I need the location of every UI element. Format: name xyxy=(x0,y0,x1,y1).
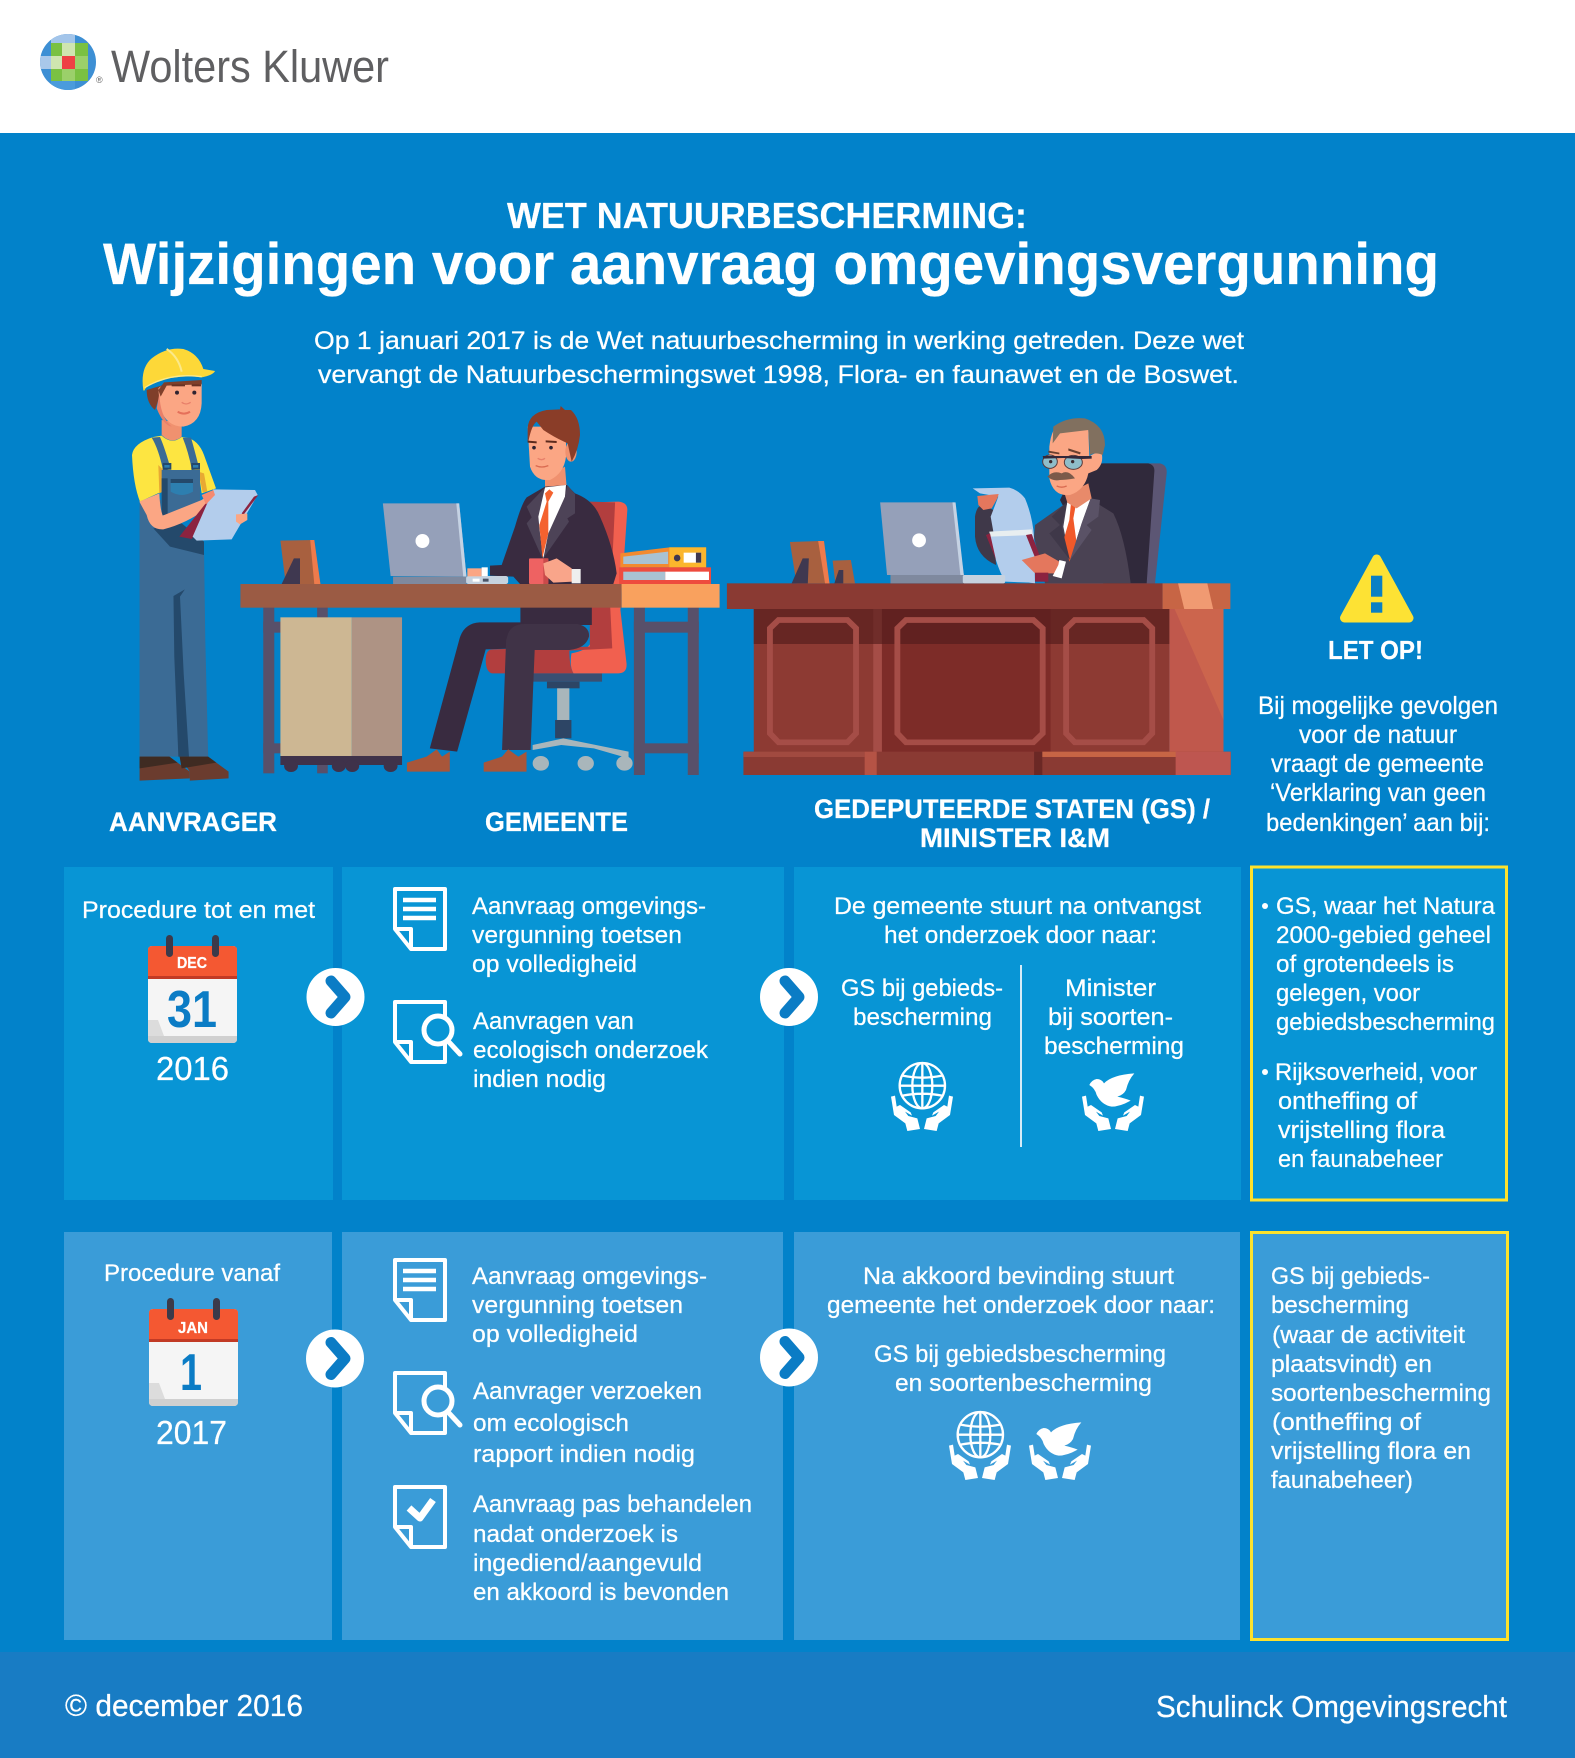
let op text: vraagt de gemeente xyxy=(1271,750,1484,778)
panel: procedure 2016: Procedure tot en met xyxy=(82,897,315,924)
binders xyxy=(619,547,711,584)
panel: provincie 2016 xyxy=(794,867,1241,1200)
arrow: row 1 second xyxy=(760,968,818,1026)
column heading: gedeputeerde staten xyxy=(814,794,1210,853)
text: GS: en soortenbescherming xyxy=(895,1370,1152,1397)
footer: publisher: Schulinck Omgevingsrecht xyxy=(1156,1689,1507,1724)
worker legs and boots xyxy=(140,500,229,781)
panel: procedure 2017: Procedure vanaf xyxy=(104,1260,280,1287)
let op text xyxy=(1258,692,1498,837)
desk legs xyxy=(263,607,699,775)
let op text: voor de natuur xyxy=(1299,721,1457,749)
footer xyxy=(0,1652,1575,1758)
text: minister xyxy=(1044,975,1184,1060)
trousers and shoes xyxy=(407,603,592,772)
logo wordmark: Wolters Kluwer xyxy=(111,41,389,92)
picture frame xyxy=(280,540,320,584)
illustration: official at large desk xyxy=(727,418,1231,775)
column heading: aanvrager: AANVRAGER xyxy=(109,807,277,837)
laptop xyxy=(880,502,1005,583)
text: toetsen xyxy=(472,893,706,978)
icon: document xyxy=(395,1260,445,1320)
panel: let op 2017: (ontheffing of xyxy=(1272,1409,1421,1436)
title block xyxy=(103,195,1439,297)
text: behandelen xyxy=(473,1491,752,1606)
text: lead: Na akkoord bevinding stuurt xyxy=(863,1263,1174,1290)
panel: let op 2016: 2000-gebied geheel xyxy=(1276,922,1491,949)
text: behandelen: Aanvraag pas behandelen xyxy=(473,1491,752,1518)
worker upper body xyxy=(132,349,258,555)
text: lead xyxy=(834,893,1201,949)
intro text xyxy=(314,327,1244,389)
column heading: gedeputeerde staten: MINISTER I&M xyxy=(920,823,1110,853)
text: lead xyxy=(827,1263,1215,1319)
text: GS: bescherming xyxy=(853,1004,992,1031)
icon: calendar january 1: JAN xyxy=(178,1320,208,1337)
icon: calendar december 31: 31 xyxy=(167,981,217,1039)
panel: procedure 2017 xyxy=(64,1232,332,1640)
icon: calendar january 1 xyxy=(149,1298,238,1406)
desk top xyxy=(240,584,720,608)
text: behandelen: nadat onderzoek is xyxy=(473,1521,678,1548)
footer: date: © december 2016 xyxy=(65,1688,303,1723)
panel: let op 2016: en faunabeheer xyxy=(1278,1146,1443,1173)
icon: dove in hands xyxy=(1029,1422,1091,1480)
officer upper body xyxy=(490,406,617,584)
text: rapport: Aanvrager verzoeken xyxy=(473,1378,702,1405)
arrow: row 2 first xyxy=(306,1330,364,1388)
text: toetsen: op volledigheid xyxy=(472,951,637,978)
text: onderzoek: ecologisch onderzoek xyxy=(473,1037,709,1064)
panel: procedure 2016: 2016 xyxy=(156,1050,229,1087)
icon: calendar january 1: 1 xyxy=(180,1344,202,1402)
icon: document with magnifier xyxy=(395,1002,460,1062)
text: toetsen: vergunning toetsen xyxy=(472,922,682,949)
panel: let op 2017: bescherming xyxy=(1271,1292,1409,1319)
panel: gemeente 2016 xyxy=(342,867,784,1200)
column heading: gedeputeerde staten: GEDEPUTEERDE STATEN (GS) / xyxy=(814,794,1210,824)
large wooden desk xyxy=(727,583,1231,775)
icon: document with check mark xyxy=(395,1487,445,1547)
intro text: vervangt de Natuurbeschermingswet 1998, Flora- en faunawet en de Boswet. xyxy=(318,361,1239,389)
illustration: municipal officer at desk xyxy=(240,406,720,775)
text: minister: Minister xyxy=(1065,975,1156,1002)
panel: let op 2017 xyxy=(1252,1232,1508,1640)
panel: procedure 2016 xyxy=(64,867,333,1200)
text: rapport: om ecologisch xyxy=(473,1410,629,1437)
text: GS xyxy=(841,975,1003,1031)
icon: globe in hands xyxy=(949,1412,1011,1480)
text: GS: GS bij gebieds- xyxy=(841,975,1003,1002)
picture frames xyxy=(790,541,855,583)
panel: let op 2017: vrijstelling flora en xyxy=(1271,1438,1471,1465)
text: GS xyxy=(874,1341,1166,1397)
text: GS: GS bij gebiedsbescherming xyxy=(874,1341,1166,1368)
text: lead: De gemeente stuurt na ontvangst xyxy=(834,893,1201,920)
text: minister: bij soorten- xyxy=(1048,1004,1173,1031)
warning icon xyxy=(1344,559,1409,618)
text: behandelen: en akkoord is bevonden xyxy=(473,1579,729,1606)
text: toetsen xyxy=(472,1263,707,1348)
text: toetsen: Aanvraag omgevings- xyxy=(472,893,706,920)
text: rapport xyxy=(473,1378,702,1468)
panel: let op 2017: plaatsvindt) en xyxy=(1271,1351,1432,1378)
text: lead: gemeente het onderzoek door naar: xyxy=(827,1292,1215,1319)
desk, frames and laptop xyxy=(727,502,1231,775)
text: minister: bescherming xyxy=(1044,1033,1184,1060)
arrow: row 2 second xyxy=(760,1328,818,1386)
panel: let op 2016: ontheffing of xyxy=(1278,1088,1417,1115)
icon: globe in hands xyxy=(891,1063,953,1131)
main title: Wijzigingen voor aanvraag omgevingsvergunning xyxy=(103,232,1439,297)
text: lead: het onderzoek door naar: xyxy=(884,922,1157,949)
icon: calendar december 31 xyxy=(148,935,237,1043)
illustration: worker with notepad xyxy=(132,349,258,781)
desk, laptop and binders xyxy=(240,503,720,608)
icon: document xyxy=(395,889,445,949)
icon: calendar december 31: DEC xyxy=(177,955,207,972)
panel: let op 2016 xyxy=(1252,867,1506,1200)
column heading: gemeente: GEMEENTE xyxy=(485,807,628,837)
text: behandelen: ingediend/aangevuld xyxy=(473,1550,702,1577)
panel: let op 2016: GS, waar het Natura xyxy=(1276,893,1496,920)
official figure and chair xyxy=(973,418,1167,583)
text: rapport: rapport indien nodig xyxy=(473,1441,695,1468)
intro text: Op 1 januari 2017 is de Wet natuurbescherming in werking getreden. Deze wet xyxy=(314,327,1244,355)
panel: gemeente 2017 xyxy=(342,1232,783,1640)
panel: provincie 2017 xyxy=(794,1232,1240,1640)
text: onderzoek: Aanvragen van xyxy=(473,1008,634,1035)
arrow: row 1 first xyxy=(306,968,364,1026)
panel: let op 2016: gebiedsbescherming xyxy=(1276,1009,1495,1036)
panel: let op 2016: of grotendeels is xyxy=(1276,951,1454,978)
let op text: ‘Verklaring van geen xyxy=(1270,779,1486,807)
overline: WET NATUURBESCHERMING: xyxy=(507,195,1027,236)
panel: let op 2016: vrijstelling flora xyxy=(1278,1117,1446,1144)
panel: let op 2017: (waar de activiteit xyxy=(1272,1322,1465,1349)
logo: Wolters Kluwer globe xyxy=(40,34,103,90)
let op text: Bij mogelijke gevolgen xyxy=(1258,692,1498,720)
panel: let op 2016: gelegen, voor xyxy=(1276,980,1420,1007)
logo: Wolters Kluwer globe: ® xyxy=(96,75,103,85)
chair, trousers and lower torso xyxy=(263,502,699,775)
icon: dove in hands xyxy=(1082,1073,1144,1131)
filing cabinet xyxy=(280,617,402,772)
text: toetsen: op volledigheid xyxy=(472,1321,638,1348)
text: toetsen: vergunning toetsen xyxy=(472,1292,683,1319)
icon: document with magnifier xyxy=(395,1373,460,1433)
text: onderzoek: indien nodig xyxy=(473,1066,606,1093)
text: toetsen: Aanvraag omgevings- xyxy=(472,1263,707,1290)
laptop xyxy=(383,503,508,584)
let op heading: LET OP! xyxy=(1328,635,1423,665)
panel: let op 2017: faunabeheer) xyxy=(1271,1467,1413,1494)
text: onderzoek xyxy=(473,1008,709,1093)
panel: procedure 2017: 2017 xyxy=(156,1414,227,1451)
header bar xyxy=(0,0,1575,133)
office chair xyxy=(486,502,633,771)
let op text: bedenkingen’ aan bij: xyxy=(1266,809,1490,837)
panel: let op 2017: GS bij gebieds- xyxy=(1271,1263,1430,1290)
panel: let op 2016: Rijksoverheid, voor xyxy=(1275,1059,1477,1086)
panel: let op 2017: soortenbescherming xyxy=(1271,1380,1491,1407)
